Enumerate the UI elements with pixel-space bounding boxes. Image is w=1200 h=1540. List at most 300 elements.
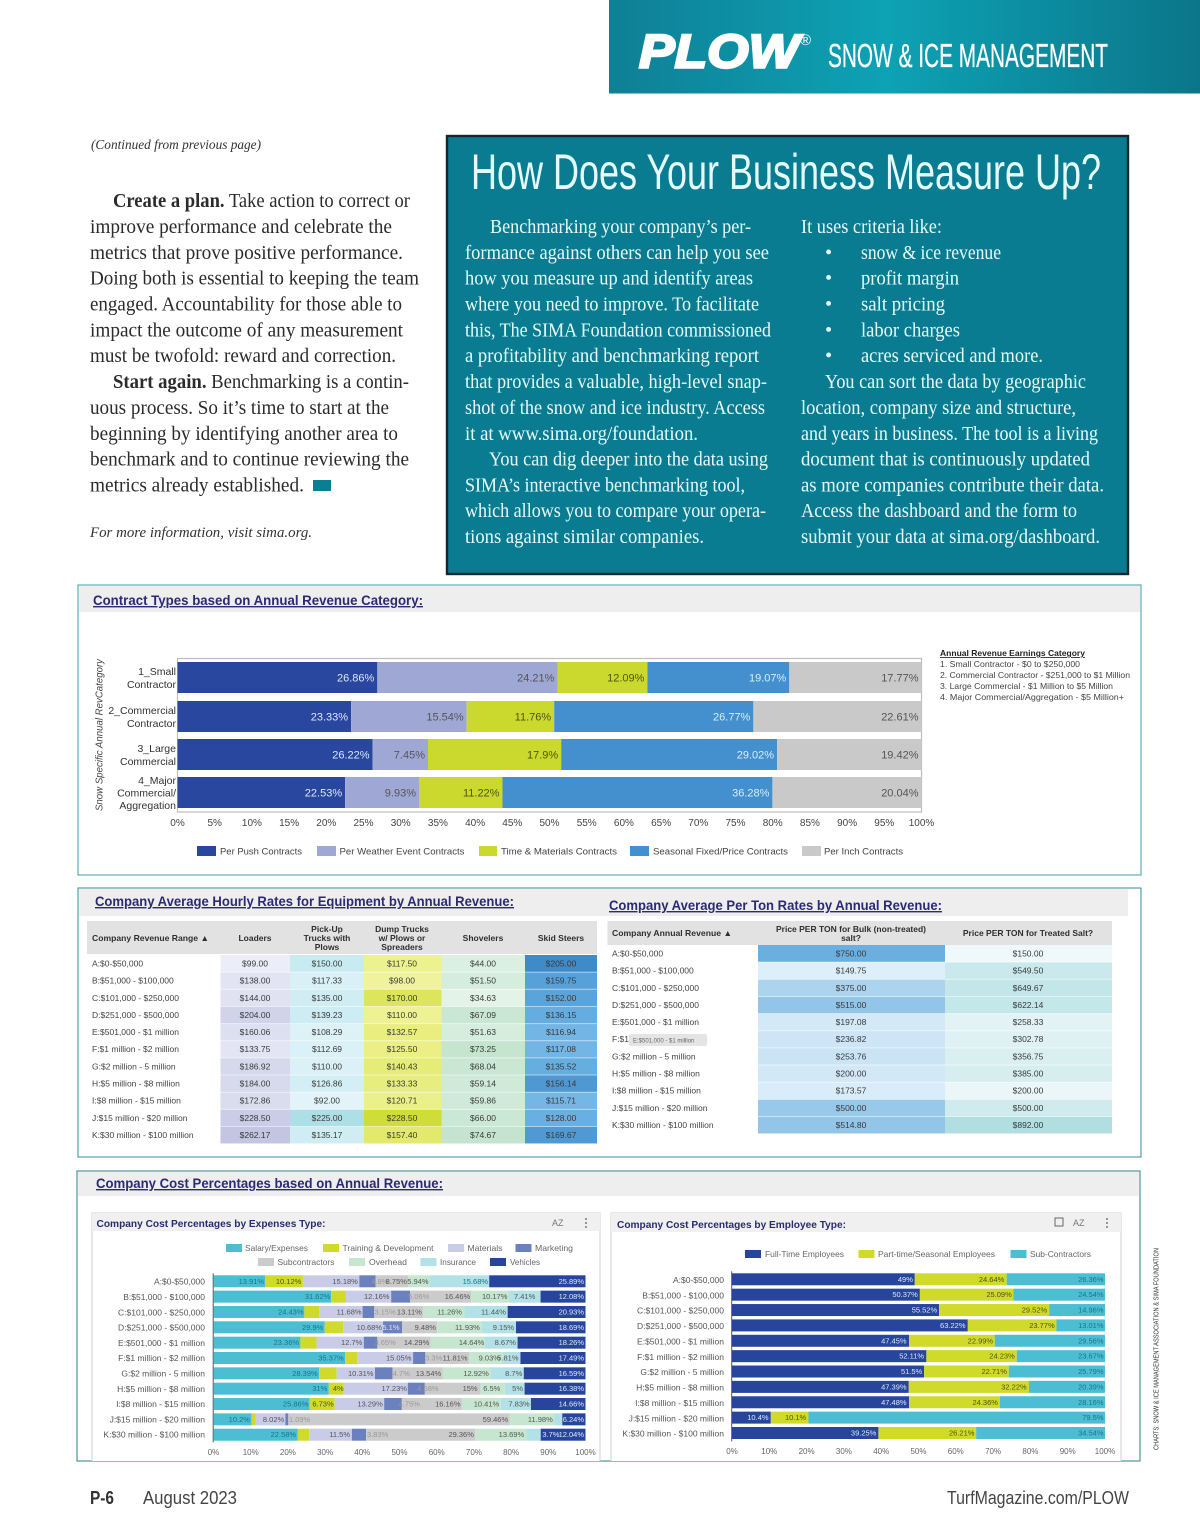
stacked bar chart: expenses: 9.48% [415, 1323, 436, 1332]
category labels: Commercial [120, 756, 176, 768]
right text column: You can sort the data by geographic [825, 371, 1086, 393]
stacked bar chart: expenses: 16.16% [435, 1400, 461, 1409]
stacked bar chart: expenses: 13.91% [239, 1277, 264, 1286]
tooltip: E:$501,000 - $1 million [633, 1038, 694, 1044]
table: hourly rates: $159.75 [546, 976, 577, 986]
category labels: G:$2 million - 5 million [121, 1368, 205, 1378]
table: hourly rates: E:$501,000 - $1 million [92, 1027, 179, 1037]
x axis labels: 50% [910, 1447, 927, 1456]
table: per ton rates: B:$51,000 - $100,000 [612, 966, 694, 976]
right text column: as more companies contribute their data. [801, 474, 1104, 496]
stacked bar chart: employees: 49% [898, 1275, 913, 1284]
revenue category key: 2. Commercial Contractor - $251,000 to $1 Million [940, 670, 1130, 680]
icon: sort: AZ [552, 1218, 564, 1228]
stacked bar chart: contract types: 19.42% [881, 750, 919, 762]
stacked bar chart: expenses: 8.02% [263, 1415, 284, 1424]
chart title: Company Cost Percentages by Expenses Type: [96, 1218, 326, 1230]
stacked bar chart: expenses: 12.7% [341, 1338, 363, 1347]
heading: hourly rates: Company Average Hourly Rates for Equipment by Annual Revenue: [95, 893, 514, 909]
x axis labels: 35% [428, 818, 448, 829]
stacked bar chart: expenses: 13.11% [397, 1307, 422, 1316]
chart legend [197, 846, 903, 858]
header banner [609, 0, 1200, 94]
left text column: this, The SIMA Foundation commissioned [465, 320, 771, 342]
stacked bar chart: expenses: 10.2% [229, 1415, 250, 1424]
heading: cost percentages: Company Cost Percentages based on Annual Revenue: [96, 1175, 443, 1191]
table: hourly rates: Spreaders [381, 942, 423, 952]
table: hourly rates: Plows [315, 942, 340, 952]
x axis labels: 65% [651, 818, 671, 829]
legend: expenses: Materials [468, 1243, 502, 1253]
chart legend: Seasonal Fixed/Price Contracts [653, 846, 788, 858]
category labels: B:$51,000 - $100,000 [642, 1290, 724, 1300]
right text column: • [825, 345, 832, 367]
stacked bar chart: expenses: 59.46% [483, 1415, 508, 1424]
table: per ton rates: $356.75 [1013, 1051, 1044, 1061]
x axis labels: 60% [948, 1447, 964, 1456]
stacked bar chart: expenses: 31.62% [305, 1292, 331, 1301]
table: hourly rates: Pick-Up [311, 924, 343, 934]
revenue category key: Annual Revenue Earnings Category [940, 648, 1085, 658]
x axis labels: 25% [353, 818, 374, 829]
stacked bar chart: expenses: 5.06% [408, 1292, 430, 1301]
card: employee type chart [611, 1213, 1121, 1461]
stacked bar chart: expenses: 5% [512, 1384, 523, 1393]
category labels: J:$15 million - $20 million [110, 1414, 205, 1424]
x axis labels: 70% [985, 1447, 1001, 1456]
category labels: Contractor [127, 679, 176, 691]
stacked bar chart: contract types: 22.53% [305, 788, 342, 800]
stacked bar chart: contract types: 9.93% [385, 788, 416, 800]
table: per ton rates: $197.08 [836, 1017, 867, 1027]
stacked bar chart: employees: 13.01% [1078, 1321, 1104, 1330]
category labels: B:$51,000 - $100,000 [123, 1292, 205, 1302]
revenue category key: 4. Major Commercial/Aggregation - $5 Million+ [940, 692, 1124, 702]
panel: contract types [78, 585, 1141, 875]
table: per ton rates: E:$501,000 - $1 million [612, 1017, 699, 1027]
chart legend: Per Push Contracts [220, 846, 302, 858]
revenue category key: 1. Small Contractor - $0 to $250,000 [940, 659, 1080, 669]
table: hourly rates: $225.00 [312, 1113, 343, 1123]
x axis labels: 50% [391, 1448, 408, 1457]
table: hourly rates: Dump Trucks [375, 924, 429, 934]
table: per ton rates: Company Annual Revenue ▲ [612, 928, 732, 938]
table: hourly rates: $135.17 [312, 1130, 343, 1140]
table: hourly rates: $59.14 [470, 1078, 496, 1088]
table: per ton rates: $150.00 [1013, 948, 1044, 958]
card: expenses type chart [92, 1213, 600, 1461]
legend: expenses: Vehicles [510, 1257, 540, 1267]
table: per ton rates: $200.00 [1013, 1086, 1044, 1096]
right text column: It uses criteria like: [801, 216, 942, 238]
x axis labels: 70% [466, 1448, 482, 1457]
category labels: H:$5 million - $8 million [636, 1383, 724, 1393]
x axis labels: 100% [1095, 1447, 1115, 1456]
x axis labels [208, 1448, 596, 1457]
table: per ton rates: G:$2 million - 5 million [612, 1051, 696, 1061]
table: hourly rates: $132.57 [387, 1027, 418, 1037]
table: hourly rates: $172.86 [240, 1096, 271, 1106]
stacked bar chart: expenses: 15.18% [332, 1277, 358, 1286]
article text column: Doing both is essential to keeping the team [90, 268, 419, 290]
right text column: • [825, 320, 832, 342]
table: per ton rates: $258.33 [1013, 1017, 1044, 1027]
stacked bar chart: contract types: 11.22% [463, 788, 500, 800]
stacked bar chart: employees: 34.54% [1078, 1429, 1104, 1438]
article text column: Create a plan. Take action to correct or [113, 190, 410, 212]
legend: employees: Sub-Contractors [1030, 1249, 1091, 1259]
stacked bar chart: employees: 24.54% [1078, 1290, 1104, 1299]
stacked bar chart: expenses: 15.05% [386, 1354, 412, 1363]
right text column: profit margin [861, 268, 959, 290]
left text column [465, 216, 771, 548]
website: TurfMagazine.com/PLOW [947, 1488, 1129, 1508]
table: hourly rates: $92.00 [314, 1096, 340, 1106]
stacked bar chart: contract types: 20.04% [881, 788, 919, 800]
stacked bar chart: employees: 25.09% [986, 1290, 1012, 1299]
x axis labels: 90% [1060, 1447, 1076, 1456]
stacked bar chart: expenses: 6.24% [563, 1415, 584, 1424]
stacked bar chart: employees: 39.25% [851, 1429, 877, 1438]
x axis labels: 50% [539, 818, 560, 829]
category labels: C:$101,000 - $250,000 [637, 1306, 724, 1316]
category labels: K:$30 million - $100 million [622, 1429, 724, 1439]
left text column: You can dig deeper into the data using [489, 448, 768, 470]
table: hourly rates: $51.50 [470, 976, 496, 986]
table: hourly rates: $133.75 [240, 1044, 271, 1054]
stacked bar chart: expenses: 14.66% [559, 1400, 584, 1409]
stacked bar chart: expenses: 5.94% [407, 1277, 429, 1286]
stacked bar chart: expenses: 28.39% [292, 1369, 318, 1378]
stacked bar chart: expenses: 3.7% [542, 1430, 560, 1439]
table: hourly rates: $67.09 [470, 1010, 496, 1020]
x axis labels: 80% [503, 1448, 519, 1457]
table: hourly rates: $34.63 [470, 993, 496, 1003]
table: hourly rates: $74.67 [470, 1130, 496, 1140]
table: per ton rates: $750.00 [836, 948, 867, 958]
stacked bar chart: expenses: 11.44% [481, 1307, 506, 1316]
left text column: where you need to improve. To facilitate [465, 294, 759, 316]
stacked bar chart: expenses: 9.03% [479, 1354, 500, 1363]
stacked bar chart: employees: 26.21% [949, 1429, 975, 1438]
x axis labels: 5% [207, 818, 222, 829]
stacked bar chart: expenses: 11.81% [443, 1354, 468, 1363]
x axis labels: 30% [836, 1447, 852, 1456]
table: hourly rates: $140.43 [387, 1061, 418, 1071]
article text column: metrics that prove positive performance. [90, 242, 403, 264]
table: hourly rates: $51.63 [470, 1027, 496, 1037]
category labels: D:$251,000 - $500,000 [118, 1323, 205, 1333]
table: per ton rates: Price PER TON for Bulk (non-treated) [776, 924, 926, 934]
table: hourly rates: $262.17 [240, 1130, 271, 1140]
right text column: labor charges [861, 320, 960, 342]
x axis labels: 10% [761, 1447, 777, 1456]
stacked bar chart: expenses: 11.26% [437, 1307, 462, 1316]
table: per ton rates: $302.78 [1013, 1034, 1044, 1044]
stacked bar chart: expenses: 20.93% [559, 1307, 584, 1316]
panel: hourly and per ton rates [78, 888, 1141, 1157]
table: hourly rates: $186.92 [240, 1061, 271, 1071]
stacked bar chart: expenses: 8.75% [386, 1277, 407, 1286]
table: hourly rates: $110.00 [387, 1010, 417, 1020]
table: hourly rates: $228.50 [387, 1113, 418, 1123]
stacked bar chart: expenses: 25.89% [559, 1277, 584, 1286]
right text column: acres serviced and more. [861, 345, 1043, 367]
stacked bar chart: employees: 51.5% [901, 1367, 923, 1376]
x axis labels: 75% [725, 818, 746, 829]
category labels: A:$0-$50,000 [154, 1276, 205, 1286]
page number: P-6 [90, 1488, 114, 1508]
table: hourly rates: $139.23 [312, 1010, 343, 1020]
table: hourly rates: $169.67 [546, 1130, 577, 1140]
stacked bar chart: expenses: 14.29% [404, 1338, 430, 1347]
stacked bar chart: contract types: 36.28% [732, 788, 770, 800]
stacked bar chart: employees: 24.64% [979, 1275, 1005, 1284]
table: hourly rates: J:$15 million - $20 million [92, 1113, 188, 1123]
article text column: engaged. Accountability for those able to [90, 294, 402, 316]
table: hourly rates: D:$251,000 - $500,000 [92, 1010, 179, 1020]
table: hourly rates: $125.50 [387, 1044, 418, 1054]
stacked bar chart: expenses: 8.7% [505, 1369, 523, 1378]
x axis labels: 0% [726, 1447, 738, 1456]
table: hourly rates: $117.33 [312, 976, 342, 986]
stacked bar chart: expenses: 11.93% [455, 1323, 480, 1332]
stacked bar chart: expenses: 4.58% [417, 1384, 439, 1393]
issue date: August 2023 [143, 1488, 237, 1508]
stacked bar chart: expenses: 3.3% [425, 1354, 443, 1363]
stacked bar chart: contract types: 26.77% [713, 712, 751, 724]
stacked bar chart: expenses: 15% [463, 1384, 478, 1393]
table: hourly rates: $205.00 [546, 958, 577, 968]
table: hourly rates: $144.00 [240, 993, 271, 1003]
left text column: tions against similar companies. [465, 526, 704, 548]
stacked bar chart: employees: 10.4% [747, 1413, 769, 1422]
icon: image export [1055, 1218, 1063, 1226]
x axis labels: 0% [170, 818, 185, 829]
stacked bar chart: employees: 24.36% [973, 1398, 998, 1407]
table: hourly rates: Trucks with [304, 933, 350, 943]
stacked bar chart: expenses: 13.29% [357, 1400, 383, 1409]
table: per ton rates: salt? [841, 933, 861, 943]
table: hourly rates: Company Revenue Range ▲ [92, 933, 209, 943]
stacked bar chart: expenses: 5.81% [497, 1354, 519, 1363]
right text column: • [825, 242, 832, 264]
x axis labels [726, 1447, 1115, 1456]
right text column: and years in business. The tool is a living [801, 423, 1098, 445]
table: hourly rates: $160.06 [240, 1027, 271, 1037]
x axis labels [170, 818, 934, 829]
x axis labels: 100% [575, 1448, 596, 1457]
table: hourly rates: C:$101,000 - $250,000 [92, 993, 179, 1003]
right text column [801, 216, 1104, 548]
article text column: metrics already established. [90, 474, 304, 496]
stacked bar chart: expenses: 11.68% [337, 1307, 362, 1316]
table: hourly rates: I:$8 million - $15 million [92, 1096, 181, 1106]
category labels: A:$0-$50,000 [673, 1275, 724, 1285]
stacked bar chart: employees: 50.37% [892, 1290, 918, 1299]
x axis labels: 20% [280, 1448, 296, 1457]
table: per ton rates: $500.00 [1013, 1103, 1044, 1113]
table: hourly rates: $138.00 [240, 976, 271, 986]
stacked bar chart: expenses: 5.1% [382, 1323, 400, 1332]
category labels: F:$1 million - $2 million [637, 1352, 724, 1362]
registered mark: ® [800, 32, 811, 49]
stacked bar chart: employees: 22.71% [981, 1367, 1007, 1376]
stacked bar chart: expenses: 4% [333, 1384, 344, 1393]
stacked bar chart: expenses: 10.68% [357, 1323, 382, 1332]
x axis labels: 45% [502, 818, 522, 829]
continued note: (Continued from previous page) [91, 138, 261, 153]
stacked bar chart: employees: 10.1% [785, 1413, 807, 1422]
revenue category key: 3. Large Commercial - $1 Million to $5 Million [940, 681, 1113, 691]
stacked bar chart: employees: 32.22% [1001, 1382, 1027, 1391]
table: per ton rates: $236.82 [836, 1034, 867, 1044]
x axis labels: 70% [688, 818, 708, 829]
stacked bar chart: expenses: 35.37% [318, 1354, 344, 1363]
stacked bar chart: employees: 20.39% [1078, 1382, 1104, 1391]
category labels [103, 1276, 205, 1440]
stacked bar chart: expenses: 29.36% [448, 1430, 474, 1439]
article text column [90, 190, 419, 496]
table: hourly rates: $117.08 [546, 1044, 576, 1054]
category labels: C:$101,000 - $250,000 [118, 1307, 205, 1317]
left text column: SIMA’s interactive benchmarking tool, [465, 474, 745, 496]
table: hourly rates: $44.00 [470, 958, 496, 968]
legend: expenses: Salary/Expenses [245, 1243, 308, 1253]
table: hourly rates: H:$5 million - $8 million [92, 1078, 180, 1088]
table: per ton rates: $649.67 [1013, 983, 1044, 993]
legend: employees: Part-time/Seasonal Employees [878, 1249, 995, 1259]
chart legend: Per Inch Contracts [824, 846, 903, 858]
x axis labels: 80% [763, 818, 783, 829]
x axis labels: 10% [242, 818, 262, 829]
category labels: Contractor [127, 718, 176, 730]
heading: per ton rates: Company Average Per Ton Rates by Annual Revenue: [609, 897, 942, 913]
table: hourly rates: $133.33 [387, 1078, 418, 1088]
x axis labels: 40% [873, 1447, 889, 1456]
icon: sort: AZ [1073, 1218, 1085, 1228]
table: hourly rates: $116.94 [546, 1027, 576, 1037]
stacked bar chart: contract types: 26.22% [332, 750, 370, 762]
legend: employees [745, 1249, 1091, 1259]
category labels: E:$501,000 - $1 million [118, 1338, 205, 1348]
table: hourly rates: Skid Steers [538, 933, 584, 943]
stacked bar chart: contract types: 11.76% [515, 712, 551, 724]
table: hourly rates: $152.00 [546, 993, 577, 1003]
stacked bar chart: contract types: 7.45% [394, 750, 425, 762]
table: hourly rates: $128.00 [546, 1113, 577, 1123]
stacked bar chart: expenses: 12.04% [559, 1430, 584, 1439]
stacked bar chart: expenses: 12.08% [559, 1292, 584, 1301]
table: per ton rates: K:$30 million - $100 million [612, 1120, 714, 1130]
table: hourly rates: $99.00 [242, 958, 268, 968]
table: per ton rates: I:$8 million - $15 million [612, 1086, 701, 1096]
stacked bar chart: expenses: 6.73% [312, 1400, 334, 1409]
x axis labels: 85% [800, 818, 820, 829]
x axis labels: 20% [799, 1447, 815, 1456]
stacked bar chart: contract types: 17.77% [881, 672, 919, 684]
table: per ton rates: Price PER TON for Treated Salt? [963, 928, 1093, 938]
stacked bar chart: contract types: 29.02% [737, 750, 774, 762]
right text column: document that is continuously updated [801, 448, 1090, 470]
table: hourly rates [87, 921, 597, 1144]
category labels: E:$501,000 - $1 million [637, 1336, 724, 1346]
table: hourly rates: B:$51,000 - $100,000 [92, 976, 174, 986]
table: per ton rates: F:$1 [612, 1034, 629, 1044]
category labels: D:$251,000 - $500,000 [637, 1321, 724, 1331]
stacked bar chart: employees: 29.52% [1022, 1306, 1048, 1315]
stacked bar chart: expenses: 24.43% [278, 1307, 304, 1316]
stacked bar chart: employees: 23.77% [1029, 1321, 1055, 1330]
table: hourly rates: $112.69 [312, 1044, 342, 1054]
stacked bar chart: contract types: 22.61% [881, 712, 919, 724]
table: per ton rates: $253.76 [836, 1051, 867, 1061]
table: hourly rates: $59.86 [470, 1096, 496, 1106]
stacked bar chart: contract types: 24.21% [517, 672, 555, 684]
table: hourly rates: $98.00 [389, 976, 415, 986]
left text column: which allows you to compare your opera- [465, 500, 766, 522]
x axis labels: 10% [243, 1448, 259, 1457]
stacked bar chart: expenses: 17.49% [559, 1354, 584, 1363]
x axis labels: 90% [540, 1448, 556, 1457]
article text column: Start again. Benchmarking is a contin- [113, 371, 409, 393]
table: hourly rates: F:$1 million - $2 million [92, 1044, 179, 1054]
stacked bar chart: expenses: 16.38% [559, 1384, 584, 1393]
stacked bar chart: expenses: 25.86% [283, 1400, 309, 1409]
stacked bar chart: employees: 79.5% [1082, 1413, 1104, 1422]
table: hourly rates: $170.00 [387, 993, 418, 1003]
left text column: that provides a valuable, high-level snap- [465, 371, 767, 393]
stacked bar chart: employees: 22.99% [968, 1336, 993, 1345]
table: hourly rates: Loaders [238, 933, 272, 943]
table: hourly rates: $117.50 [387, 958, 417, 968]
stacked bar chart: employees: 47.45% [881, 1336, 907, 1345]
left text column: a profitability and benchmarking report [465, 345, 759, 367]
x axis labels: 80% [1022, 1447, 1038, 1456]
right text column: submit your data at sima.org/dashboard. [801, 526, 1100, 548]
logo: PLOW: PLOW [639, 24, 803, 78]
category labels: 4_Major [138, 775, 177, 787]
category labels: G:$2 million - 5 million [640, 1367, 724, 1377]
stacked bar chart: employees: 23.67% [1078, 1352, 1104, 1361]
category labels [108, 666, 177, 812]
right text column: Access the dashboard and the form to [801, 500, 1077, 522]
stacked bar chart: expenses: 9.15% [493, 1323, 514, 1332]
stacked bar chart: employees: 47.39% [881, 1382, 907, 1391]
stacked bar chart: expenses: 3.65% [374, 1338, 396, 1347]
category labels: 2_Commercial [108, 705, 176, 717]
table: per ton rates: $200.00 [836, 1068, 867, 1078]
stacked bar chart: contract types: 19.07% [749, 672, 787, 684]
table: hourly rates: w/ Plows or [378, 933, 426, 943]
table: hourly rates: K:$30 million - $100 million [92, 1130, 194, 1140]
icon: menu [1106, 1218, 1108, 1228]
table: hourly rates: $108.29 [312, 1027, 343, 1037]
stacked bar chart: expenses: 8.67% [495, 1338, 516, 1347]
stacked bar chart: expenses: 18.26% [559, 1338, 584, 1347]
left text column: shot of the snow and ice industry. Access [465, 397, 765, 419]
x axis labels: 30% [317, 1448, 333, 1457]
category labels: K:$30 million - $100 million [103, 1430, 205, 1440]
table: hourly rates: $73.25 [470, 1044, 496, 1054]
table: per ton rates: $149.75 [836, 966, 867, 976]
category labels: H:$5 million - $8 million [117, 1384, 205, 1394]
table: per ton rates: $515.00 [836, 1000, 867, 1010]
stacked bar chart: employees: 28.16% [1078, 1398, 1104, 1407]
table: per ton rates: A:$0-$50,000 [612, 948, 663, 958]
table: hourly rates: $135.52 [546, 1061, 577, 1071]
table: per ton rates: D:$251,000 - $500,000 [612, 1000, 699, 1010]
